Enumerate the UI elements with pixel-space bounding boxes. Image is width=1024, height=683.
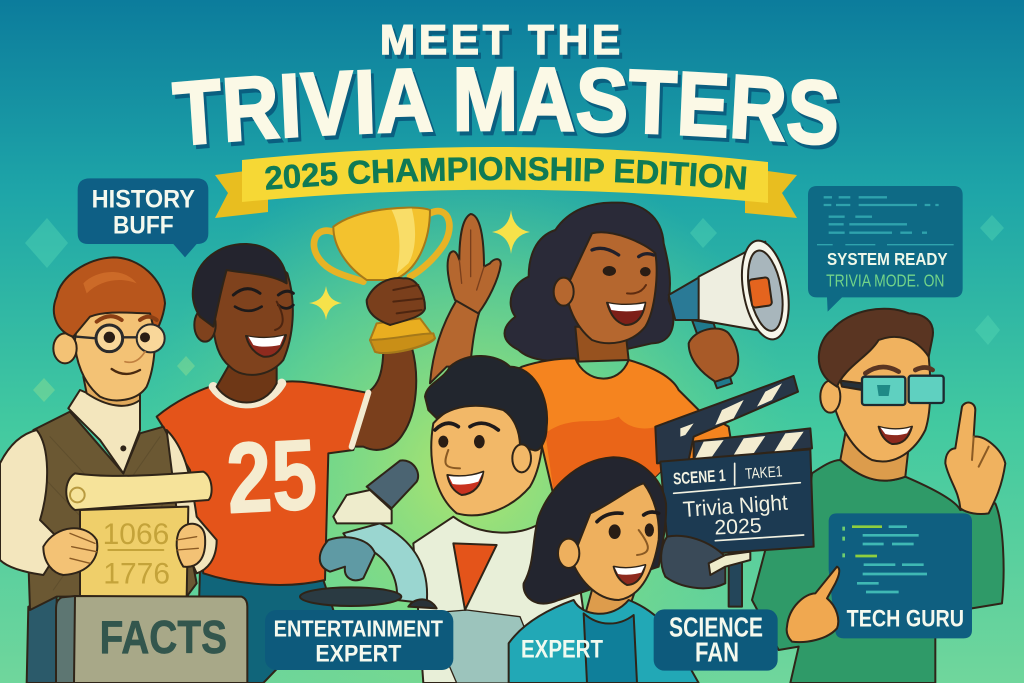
title line: trivia masters: TRIVIA MASTERS <box>172 66 840 150</box>
title line: meet the: MEET THE <box>380 16 620 63</box>
science fan label: SCIENCE <box>669 612 763 643</box>
system ready speech bubble: TRIVIA MODE. ON <box>826 271 944 291</box>
clapperboard: TAKE1 <box>745 463 783 483</box>
science fan label <box>654 609 778 671</box>
trophy <box>314 208 449 353</box>
history buff label: HISTORY <box>92 186 195 214</box>
entertainment expert label: ENTERTAINMENT <box>274 616 443 642</box>
history buff label <box>78 178 208 257</box>
sparkles <box>309 210 530 320</box>
system ready speech bubble <box>808 186 963 312</box>
young expert woman <box>509 457 699 683</box>
illustrated cast <box>0 178 1005 683</box>
woman with megaphone <box>495 203 796 503</box>
history scroll: 1776 <box>103 557 170 590</box>
woman raised arm <box>430 214 501 383</box>
athlete in jersey 25 with trophy: 25 <box>224 418 320 535</box>
tech guru laptop panel <box>829 513 972 638</box>
history buff label: BUFF <box>113 211 174 239</box>
clapperboard <box>655 376 814 557</box>
megaphone <box>669 237 796 388</box>
tech guru raised hand <box>945 403 1005 514</box>
clapperboard: Trivia Night <box>682 490 789 522</box>
facts stone: FACTS <box>100 611 227 663</box>
expert label: EXPERT <box>521 635 603 663</box>
tech guru man <box>752 309 1005 683</box>
history scroll <box>66 472 212 597</box>
microscope <box>300 460 437 608</box>
tech guru pointing hand <box>787 567 839 642</box>
subtitle ribbon: 2025 CHAMPIONSHIP EDITION <box>265 156 746 190</box>
camera on stand <box>661 536 750 607</box>
clapperboard: 2025 <box>714 514 762 540</box>
scientist in lab coat <box>413 356 593 683</box>
subtitle ribbon <box>215 147 797 218</box>
entertainment expert label <box>265 610 453 670</box>
title <box>172 16 840 150</box>
system ready speech bubble: SYSTEM READY <box>827 249 948 269</box>
clapperboard: SCENE 1 <box>672 466 726 488</box>
entertainment expert label: EXPERT <box>315 640 402 667</box>
tech guru laptop panel: TECH GURU <box>847 606 964 633</box>
facts stone <box>56 596 247 683</box>
history buff man with scroll <box>0 257 217 683</box>
history scroll: 1066 <box>103 518 169 551</box>
science fan label: FAN <box>695 637 739 668</box>
athlete in jersey 25 with trophy <box>157 208 449 683</box>
